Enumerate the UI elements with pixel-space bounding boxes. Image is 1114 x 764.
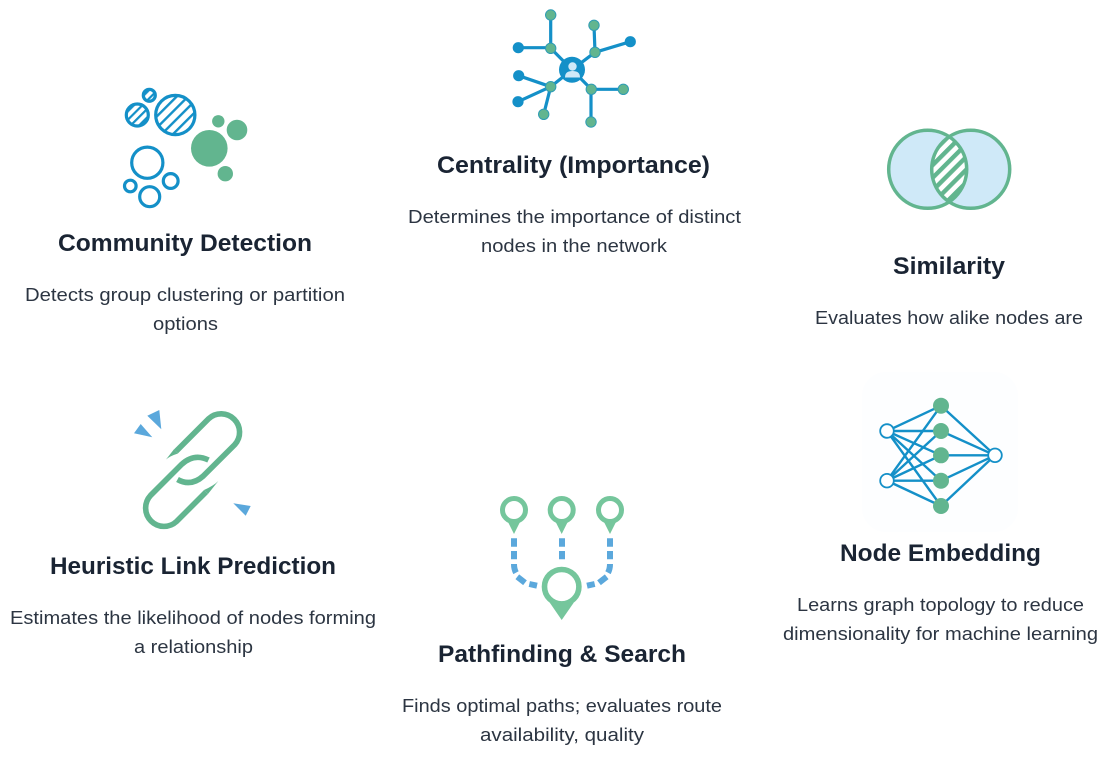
icon: chain link (134, 410, 251, 526)
text: heuristic link prediction description: Estimates the likelihood of nodes forming (10, 607, 376, 628)
text: community detection description: Detects group clustering or partition (25, 284, 345, 305)
text: pathfinding description (402, 695, 722, 745)
text: node embedding description: dimensionality for machine learning (783, 623, 1098, 644)
text: centrality description (408, 206, 741, 256)
text: centrality description: nodes in the network (481, 235, 668, 256)
text: heuristic link prediction description: a relationship (134, 636, 253, 657)
text: heuristic link prediction description (10, 607, 376, 657)
text: similarity description: Evaluates how alike nodes are (815, 307, 1083, 328)
heading: community detection: Community Detection (58, 230, 312, 257)
heading: heuristic link prediction: Heuristic Link Prediction (50, 553, 336, 580)
panel: heuristic link prediction (10, 410, 376, 657)
panel: pathfinding and search (402, 498, 722, 745)
icon: community clusters (124, 89, 247, 207)
text: node embedding description: Learns graph topology to reduce (797, 594, 1084, 615)
panel: centrality (408, 10, 741, 256)
text: pathfinding description: Finds optimal paths; evaluates route (402, 695, 722, 716)
icon: venn diagram (889, 130, 1010, 208)
heading: pathfinding and search: Pathfinding & Search (438, 641, 686, 668)
panel: similarity (815, 130, 1083, 328)
icon: central user network (512, 10, 636, 127)
heading: similarity: Similarity (893, 253, 1006, 280)
icon: route pins (502, 498, 622, 620)
text: pathfinding description: availability, quality (480, 724, 645, 745)
icon: neural network (862, 372, 1018, 532)
heading: node embedding: Node Embedding (840, 540, 1041, 567)
text: community detection description: options (153, 313, 218, 334)
panel: community detection (25, 89, 345, 334)
text: centrality description: Determines the importance of distinct (408, 206, 741, 227)
text: node embedding description (783, 594, 1098, 644)
heading: centrality: Centrality (Importance) (437, 152, 710, 179)
panel: node embedding (783, 372, 1098, 644)
text: community detection description (25, 284, 345, 334)
